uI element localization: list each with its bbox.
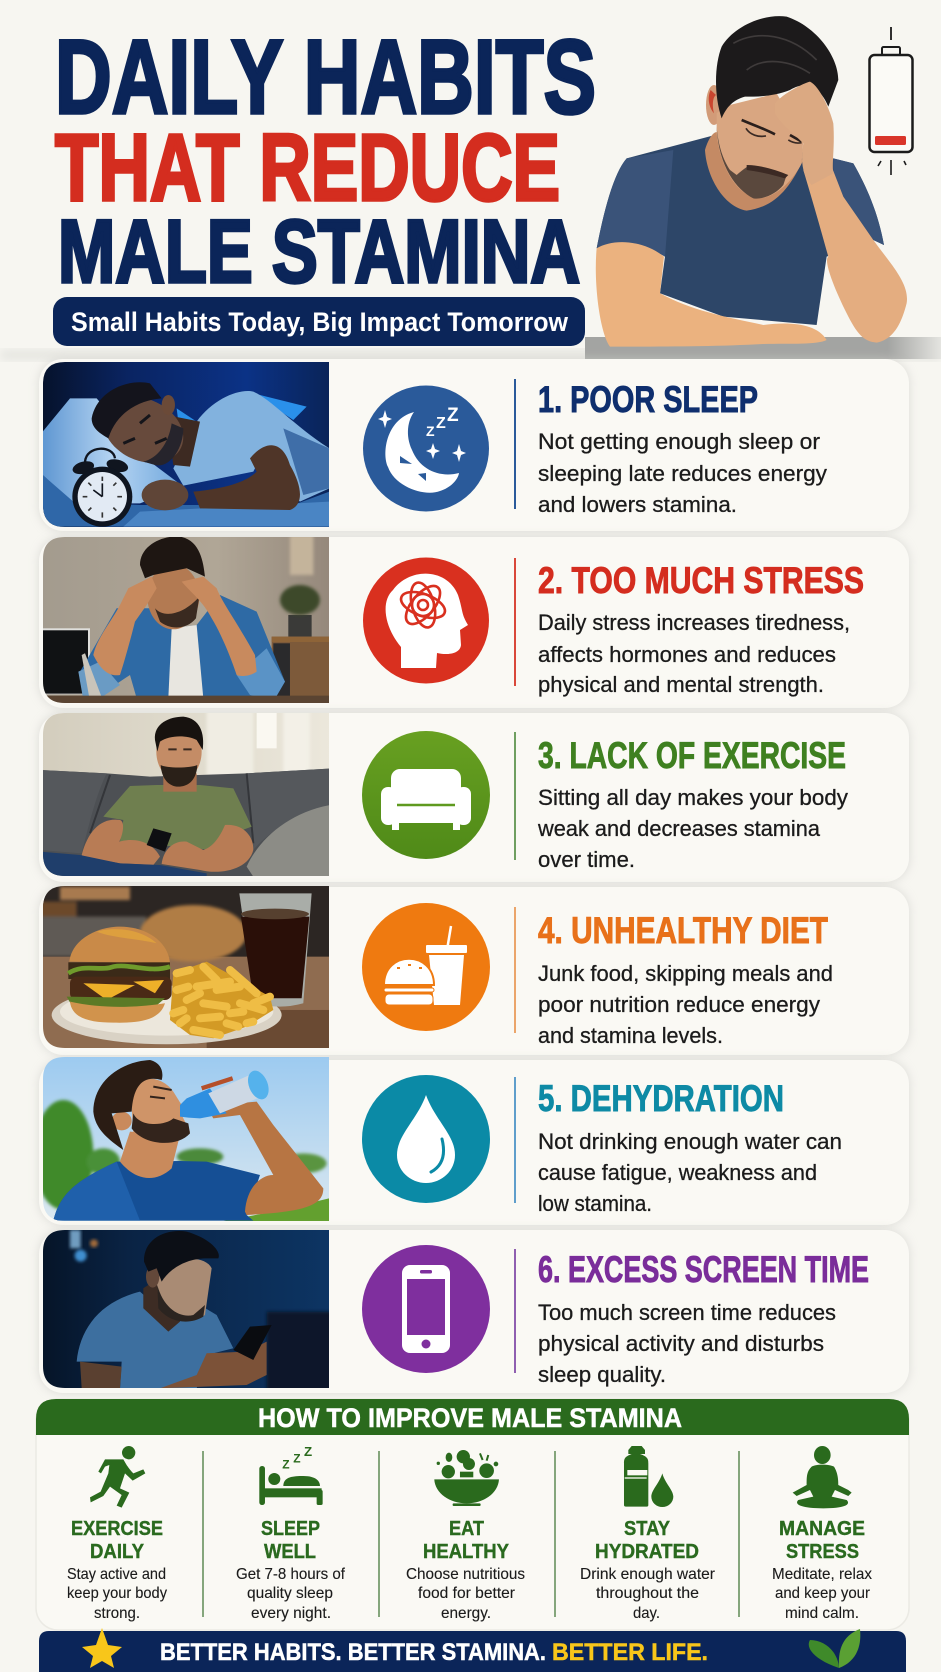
- text block: cause fatigue, weakness and: [538, 1160, 817, 1185]
- panel: 1 poor sleep: [39, 355, 909, 532]
- text block: [67, 1566, 167, 1622]
- text block: strong.: [94, 1605, 140, 1622]
- text block: and stamina levels.: [538, 1023, 723, 1048]
- divider: [514, 732, 516, 860]
- title: THAT REDUCE: [55, 115, 560, 221]
- panel header: [36, 1399, 909, 1435]
- heading: STRESS: [786, 1540, 859, 1563]
- text block: sleeping late reduces energy: [538, 461, 828, 486]
- subtitle pill: [53, 297, 585, 346]
- text block: physical and mental strength.: [538, 672, 824, 697]
- text block: day.: [633, 1605, 660, 1622]
- text block: Get 7-8 hours of: [236, 1566, 346, 1583]
- heading: [261, 1517, 320, 1563]
- icon: bed with zzz: Z: [304, 1444, 312, 1459]
- text block: Junk food, skipping meals and: [538, 961, 833, 986]
- text block: [580, 1566, 716, 1622]
- icon: sofa: [362, 731, 490, 859]
- heading: WELL: [264, 1540, 316, 1563]
- heading: HYDRATED: [595, 1540, 699, 1563]
- photo: man looking at phone in the dark: [40, 1228, 335, 1392]
- heading: HEALTHY: [423, 1540, 509, 1563]
- divider: [514, 379, 516, 509]
- text block: Not getting enough sleep or: [538, 429, 821, 454]
- heading: 5. DEHYDRATION: [538, 1078, 784, 1119]
- text block: sleep quality.: [538, 1362, 666, 1387]
- photo: burger, fries and cola: [40, 883, 335, 1050]
- text block: poor nutrition reduce energy: [538, 992, 821, 1017]
- text block: food for better: [418, 1585, 516, 1602]
- tip: manage stress: [772, 1446, 872, 1622]
- icon: salad bowl: [434, 1450, 499, 1506]
- heading: DAILY: [90, 1540, 144, 1563]
- photo: man awake in bed with alarm clock: [40, 355, 335, 532]
- text block: over time.: [538, 847, 635, 872]
- footer text: BETTER HABITS. BETTER STAMINA.: [160, 1639, 546, 1666]
- icon: burger and drink: [362, 903, 490, 1031]
- heading: [595, 1517, 699, 1563]
- heading: [779, 1517, 865, 1563]
- icon: leaves: [809, 1629, 860, 1668]
- text block: [538, 1129, 842, 1216]
- tip: eat healthy: [406, 1450, 525, 1622]
- heading: 1. POOR SLEEP: [538, 379, 758, 420]
- icon: moon and zzz: Z: [436, 415, 446, 432]
- photo: stressed man at laptop: [40, 535, 335, 706]
- text block: [538, 961, 833, 1048]
- panel header: HOW TO IMPROVE MALE STAMINA: [258, 1403, 682, 1433]
- panel: 2 too much stress: [39, 535, 909, 708]
- panel: how to improve: [36, 1399, 909, 1630]
- text block: quality sleep: [247, 1585, 333, 1602]
- text block: Meditate, relax: [772, 1566, 872, 1583]
- heading: MANAGE: [779, 1517, 865, 1540]
- tip: stay hydrated: [580, 1446, 716, 1622]
- text block: Stay active and: [67, 1566, 166, 1583]
- text block: Too much screen time reduces: [538, 1300, 836, 1325]
- text block: [538, 429, 828, 517]
- icon: moon and zzz: Z: [447, 405, 459, 426]
- heading: EXERCISE: [71, 1517, 163, 1540]
- icon: star: [82, 1628, 122, 1668]
- footer banner: [39, 1628, 906, 1672]
- text block: [538, 1300, 836, 1387]
- text block: Daily stress increases tiredness,: [538, 610, 850, 635]
- photo: man on sofa with phone: [40, 710, 335, 877]
- photo: tired man with hand on forehead at table: [585, 16, 941, 359]
- heading: [423, 1517, 509, 1563]
- text block: Choose nutritious: [406, 1566, 525, 1583]
- divider: [514, 558, 516, 686]
- text block: throughout the: [596, 1585, 699, 1602]
- text block: [772, 1566, 872, 1622]
- text block: [537, 785, 849, 872]
- heading: SLEEP: [261, 1517, 320, 1540]
- icon: bed with zzz: Z: [282, 1457, 290, 1471]
- text block: physical activity and disturbs: [538, 1331, 824, 1356]
- icon: smartphone: [362, 1245, 490, 1373]
- text block: low stamina.: [538, 1191, 652, 1216]
- footer text: BETTER LIFE.: [552, 1639, 708, 1666]
- text block: Drink enough water: [580, 1566, 716, 1583]
- heading: 3. LACK OF EXERCISE: [538, 735, 846, 776]
- text block: and lowers stamina.: [538, 492, 737, 517]
- heading: 4. UNHEALTHY DIET: [538, 910, 828, 951]
- icon: water drop: [362, 1075, 490, 1203]
- text block: every night.: [251, 1605, 331, 1622]
- text block: Sitting all day makes your body: [538, 785, 849, 810]
- title: [55, 19, 596, 301]
- text block: affects hormones and reduces: [538, 642, 836, 667]
- icon: bottle and drop: [624, 1446, 673, 1507]
- panel: 6 excess screen time: [39, 1228, 909, 1393]
- icon: moon and zzz: [363, 386, 489, 512]
- icon: runner: [90, 1446, 145, 1508]
- panel: 5 dehydration: [33, 1055, 909, 1225]
- divider: [514, 1249, 516, 1373]
- panel: 4 unhealthy diet: [39, 883, 909, 1055]
- heading: [71, 1517, 163, 1563]
- heading: 2. TOO MUCH STRESS: [538, 560, 864, 601]
- text block: weak and decreases stamina: [537, 816, 820, 841]
- text block: [406, 1566, 525, 1622]
- icon: bed with zzz: [259, 1444, 323, 1505]
- heading: EAT: [449, 1517, 484, 1540]
- title: MALE STAMINA: [58, 201, 580, 301]
- tip: sleep well: [236, 1444, 346, 1622]
- text block: [236, 1566, 346, 1622]
- text block: Not drinking enough water can: [538, 1129, 842, 1154]
- icon: meditating person: [793, 1446, 852, 1508]
- subtitle pill: Small Habits Today, Big Impact Tomorrow: [71, 307, 569, 337]
- text block: [538, 610, 850, 697]
- text block: mind calm.: [785, 1605, 859, 1622]
- title: DAILY HABITS: [55, 19, 596, 136]
- text block: keep your body: [67, 1585, 167, 1602]
- photo: man drinking from water bottle: [33, 1055, 335, 1222]
- divider: [514, 1077, 516, 1203]
- panel: 3 lack of exercise: [39, 710, 909, 882]
- text block: energy.: [441, 1605, 491, 1622]
- icon: bed with zzz: Z: [293, 1451, 301, 1465]
- text block: and keep your: [775, 1585, 871, 1602]
- icon: low battery: [870, 27, 912, 175]
- icon: head with tangled brain: [363, 558, 489, 684]
- divider: [514, 907, 516, 1033]
- icon: moon and zzz: Z: [426, 423, 435, 439]
- tip: exercise daily: [67, 1446, 167, 1622]
- heading: STAY: [624, 1517, 670, 1540]
